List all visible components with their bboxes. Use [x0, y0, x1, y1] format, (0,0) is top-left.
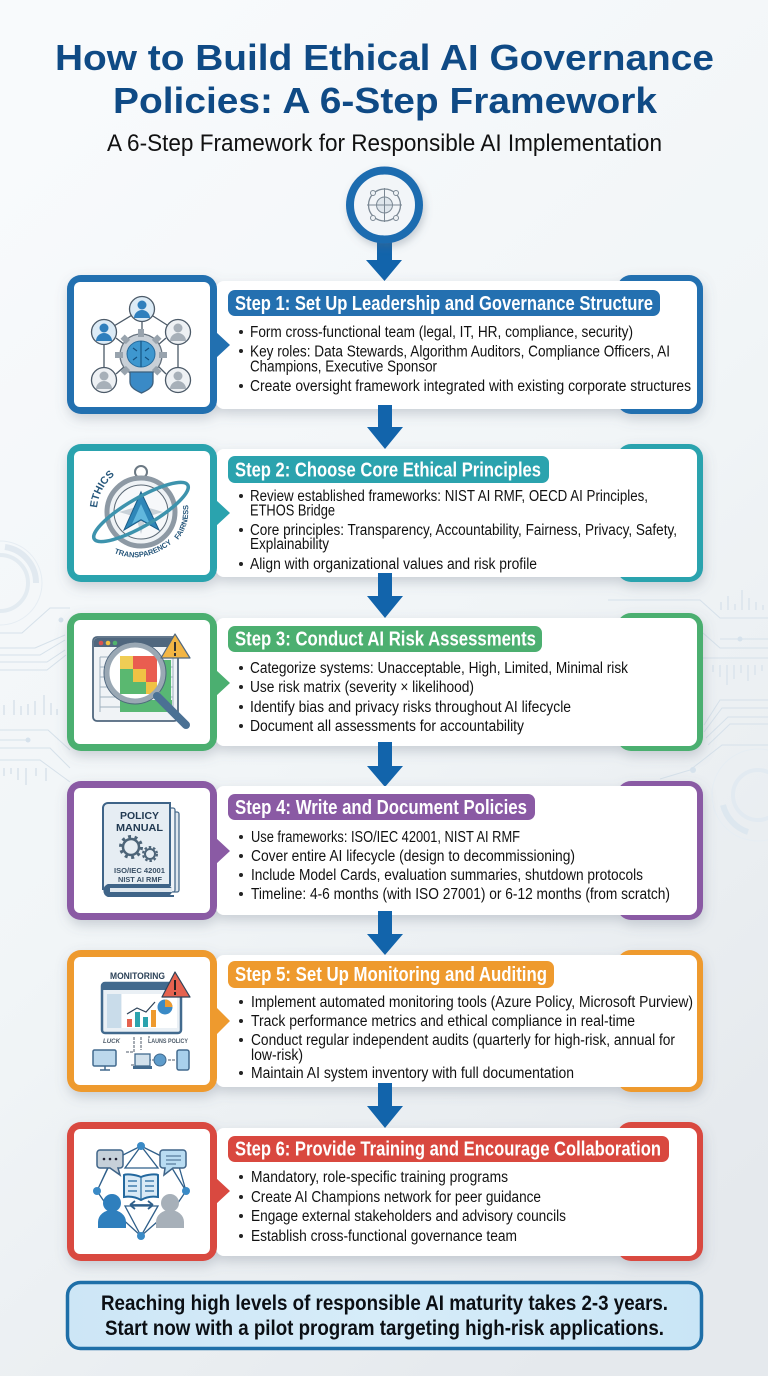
bullet list: Explainability: [250, 536, 329, 553]
bullet list: Use risk matrix (severity × likelihood): [250, 679, 474, 696]
icon: monitoring dashboard: LUCK: [103, 1038, 121, 1045]
bullet list: Identify bias and privacy risks throughout AI lifecycle: [250, 699, 571, 716]
bullet list: Cover entire AI lifecycle (design to decommissioning): [251, 848, 575, 865]
arrow 1 to 2: [367, 405, 403, 449]
bullet list: Core principles: Transparency, Accountability, Fairness, Privacy, Safety,: [250, 522, 677, 539]
bullet list: Align with organizational values and risk profile: [250, 556, 537, 573]
card frame: [67, 444, 703, 582]
bullet list: Key roles: Data Stewards, Algorithm Auditors, Compliance Officers, AI: [250, 344, 670, 360]
bullet list: [239, 829, 670, 903]
icon: training collaboration: [93, 1142, 190, 1240]
bullet list: Form cross-functional team (legal, IT, HR, compliance, security): [250, 324, 633, 341]
bullet list: Create oversight framework integrated with existing corporate structures: [250, 378, 691, 395]
bullet list: Implement automated monitoring tools (Azure Policy, Microsoft Purview): [251, 994, 693, 1011]
heading: Step 2: Choose Core Ethical Principles: [235, 460, 541, 482]
icon: policy manual: [103, 803, 179, 896]
bullet list: [239, 1169, 566, 1245]
bullet list: Engage external stakeholders and advisory councils: [251, 1208, 566, 1225]
panel: step 1: [67, 275, 703, 414]
icon: ethics compass: FAIRNESS: [174, 505, 188, 540]
arrow 2 to 3: [367, 573, 403, 618]
icon: ethics compass: [90, 465, 190, 558]
icon: monitoring dashboard: LAUNS POLICY: [148, 1038, 189, 1045]
icon: risk assessment: [93, 634, 190, 725]
heading: Step 1: Set Up Leadership and Governance Structure: [235, 293, 653, 315]
bullet list: Create AI Champions network for peer guidance: [251, 1189, 541, 1206]
bullet list: [239, 324, 691, 395]
arrow 3 to 4: [367, 742, 403, 787]
subtitle: A 6-Step Framework for Responsible AI Implementation: [107, 130, 662, 157]
panel: step 4: [67, 781, 703, 920]
callout: closing message: Reaching high levels of responsible AI maturity takes 2-3 years.: [101, 1292, 668, 1315]
bullet list: [239, 660, 628, 735]
icon: policy manual: ISO/IEC 42001: [114, 866, 165, 875]
card frame: [67, 613, 703, 751]
panel: step 2: [63, 444, 708, 592]
card frame: [67, 781, 703, 920]
icon: ethics compass: TRANSPARENCY: [116, 539, 170, 558]
heading: Step 3: Conduct AI Risk Assessments: [235, 628, 536, 650]
start arrow: [366, 238, 402, 281]
icon: monitoring dashboard: [93, 971, 190, 1070]
icon: policy manual: MANUAL: [116, 822, 164, 834]
heading: Step 4: Write and Document Policies: [235, 797, 527, 819]
bullet list: Include Model Cards, evaluation summaries, shutdown protocols: [251, 867, 643, 884]
bullet list: Establish cross-functional governance team: [251, 1228, 517, 1245]
icon: monitoring dashboard: MONITORING: [110, 971, 165, 981]
bullet list: Maintain AI system inventory with full documentation: [251, 1065, 574, 1082]
title: How to Build Ethical AI Governance: [55, 37, 714, 78]
bullet list: ETHOS Bridge: [250, 502, 335, 520]
bullet list: Conduct regular independent audits (quarterly for high-risk, annual for: [251, 1032, 675, 1049]
circuit pattern: right: [608, 590, 768, 841]
icon: policy manual: POLICY: [120, 810, 159, 822]
callout: closing message: Start now with a pilot program targeting high-risk applications.: [105, 1317, 664, 1340]
bullet list: Document all assessments for accountability: [250, 718, 524, 735]
bullet list: [239, 488, 677, 573]
icon: globe badge: [350, 170, 419, 240]
title: [55, 37, 714, 121]
bullet list: Review established frameworks: NIST AI RMF, OECD AI Principles,: [250, 488, 648, 505]
arrow 5 to 6: [367, 1083, 403, 1128]
bullet list: low-risk): [251, 1047, 303, 1064]
arrow 4 to 5: [367, 911, 403, 955]
bullet list: Timeline: 4-6 months (with ISO 27001) or 6-12 months (from scratch): [251, 886, 670, 903]
panel: step 6: [67, 1122, 703, 1261]
bullet list: Mandatory, role-specific training programs: [251, 1169, 508, 1186]
heading: Step 6: Provide Training and Encourage Collaboration: [235, 1138, 661, 1160]
bullet list: Champions, Executive Sponsor: [250, 358, 437, 376]
bullet list: Use frameworks: ISO/IEC 42001, NIST AI RMF: [251, 829, 520, 846]
bullet list: Track performance metrics and ethical compliance in real-time: [251, 1013, 635, 1030]
card frame: [67, 950, 703, 1092]
card frame: [67, 1122, 703, 1261]
bullet list: [239, 994, 693, 1082]
icon: leadership network: [92, 296, 190, 393]
title: Policies: A 6-Step Framework: [113, 80, 658, 121]
circuit pattern: left: [0, 541, 70, 785]
panel: step 3: [67, 613, 703, 751]
bullet list: Categorize systems: Unacceptable, High, Limited, Minimal risk: [250, 660, 628, 677]
callout: closing message: [68, 1282, 702, 1348]
icon: policy manual: NIST AI RMF: [118, 875, 162, 884]
heading: Step 5: Set Up Monitoring and Auditing: [235, 964, 547, 986]
panel: step 5: [67, 950, 703, 1092]
card frame: [67, 275, 703, 414]
icon: ethics compass: ETHICS: [90, 470, 114, 508]
heading: [228, 456, 549, 483]
